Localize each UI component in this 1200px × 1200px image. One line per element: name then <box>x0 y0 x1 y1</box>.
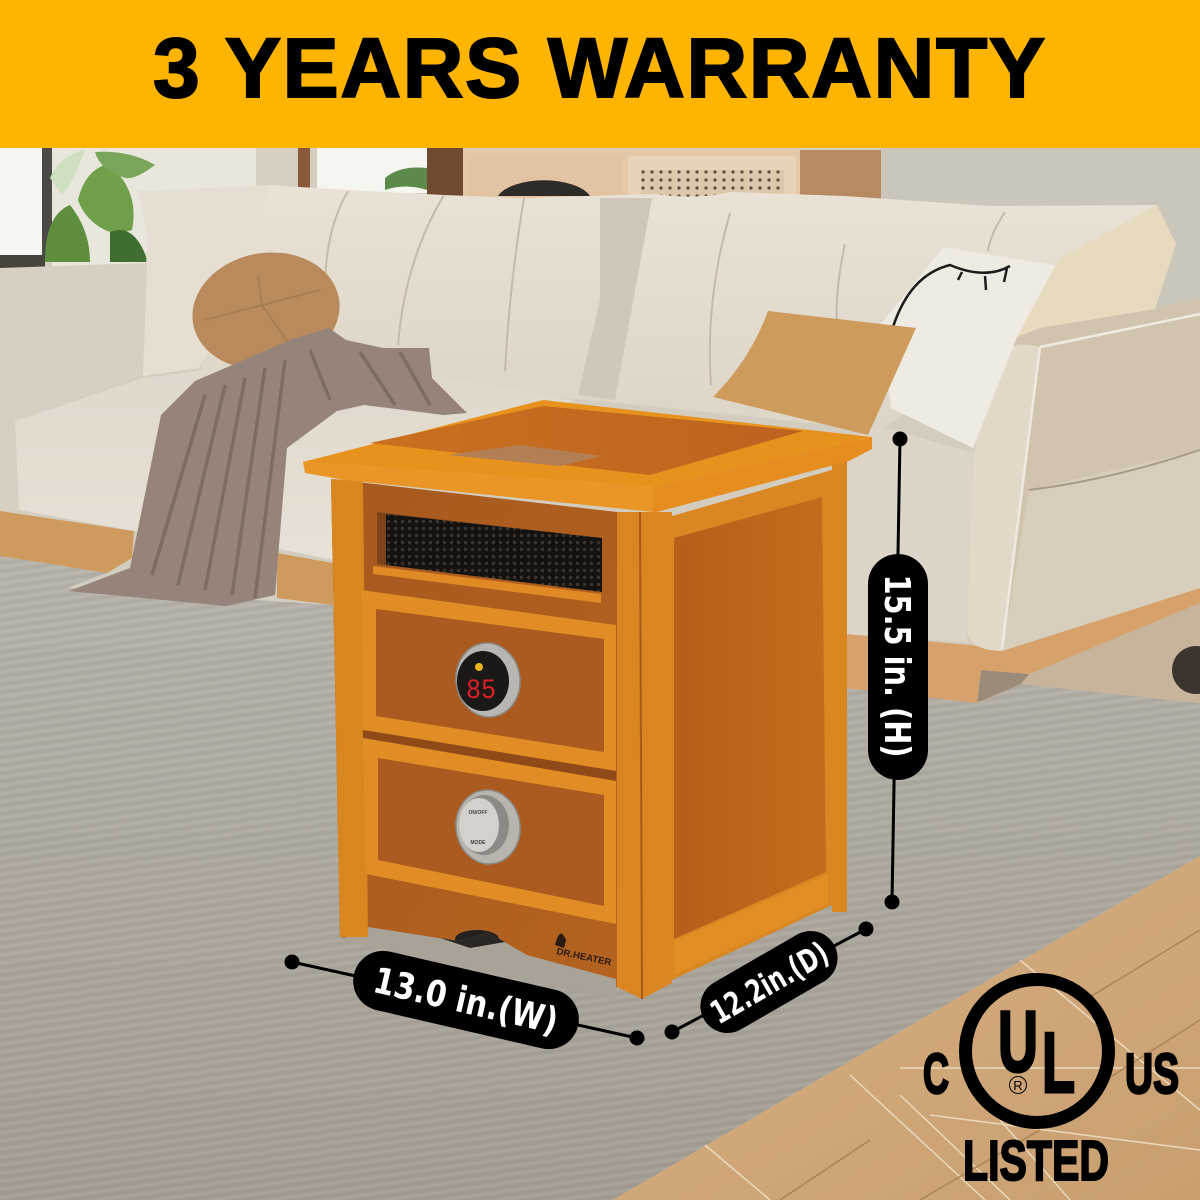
white eye pillow <box>881 247 1065 448</box>
sideboard <box>463 150 881 202</box>
control buttons: ON/OFF <box>469 810 487 816</box>
right arm <box>967 299 1200 651</box>
header banner: 3 YEARS WARRANTY <box>153 21 1045 115</box>
heater <box>303 400 872 1000</box>
sofa <box>0 185 1200 703</box>
dimension: depth <box>664 921 874 1043</box>
grille mesh <box>386 514 602 592</box>
drawer gap <box>363 730 616 781</box>
left pillow <box>138 185 268 376</box>
round tan pillow <box>183 241 349 381</box>
UL listed mark: L <box>1042 1016 1075 1111</box>
corner post <box>617 512 672 999</box>
throw blanket <box>69 328 467 606</box>
left post <box>331 479 368 937</box>
back cushions <box>200 185 654 402</box>
dimension: width: 13.0 in.(W) <box>369 960 562 1043</box>
dimension: depth: 12.2in.(D) <box>704 934 835 1032</box>
right tan pillow <box>1017 205 1176 337</box>
top surface <box>303 400 872 487</box>
wheel <box>455 930 499 948</box>
grille ledge <box>373 566 601 603</box>
dimension: height: 15.5 in. (H) <box>876 574 917 758</box>
UL listed mark: C <box>923 1042 949 1106</box>
left arm <box>0 263 147 510</box>
brand mark <box>555 934 613 969</box>
UL listed mark <box>923 980 1179 1193</box>
rug under scallop <box>340 927 616 1000</box>
right side panel <box>672 475 832 536</box>
UL listed mark: LISTED <box>963 1129 1109 1193</box>
front wood <box>331 479 617 987</box>
temperature display <box>451 639 525 721</box>
temperature display: 85 <box>466 676 496 707</box>
header banner <box>0 0 1200 148</box>
brand mark: DR.HEATER <box>555 946 613 969</box>
dimension: height <box>868 432 928 910</box>
seat <box>15 370 574 560</box>
right rim <box>653 437 872 512</box>
upper drawer <box>361 590 616 771</box>
orange pillow <box>713 311 916 435</box>
control buttons: MODE <box>470 840 486 846</box>
rug <box>0 556 1200 1200</box>
control buttons <box>451 786 525 868</box>
sofa base <box>0 511 134 573</box>
dimension: width <box>284 945 644 1055</box>
front rim <box>303 462 653 512</box>
grille inset <box>377 512 602 592</box>
UL listed mark: U <box>998 994 1038 1090</box>
lower drawer <box>363 738 616 924</box>
plant <box>45 150 427 262</box>
wood floor <box>613 600 1200 1200</box>
top sticker <box>448 445 602 466</box>
UL listed mark: R <box>1013 1078 1023 1093</box>
